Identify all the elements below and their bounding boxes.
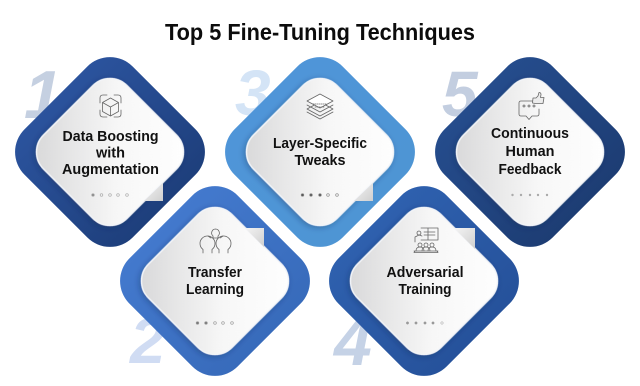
icon: cube in frame: [100, 95, 121, 117]
label 2: [186, 265, 244, 298]
label 1: [62, 129, 159, 178]
corner fold 2: [245, 228, 264, 247]
number 4: 4: [332, 304, 372, 380]
corner fold 1: [144, 183, 163, 201]
corner fold 3: [354, 183, 373, 201]
inner diamond 3: [237, 69, 403, 235]
number 2: 2: [129, 305, 166, 377]
progress dots 3: [301, 194, 338, 196]
label 5: Feedback: [498, 162, 562, 178]
inner diamond 2: [132, 198, 298, 364]
panel: step 4 adversarial training: [316, 173, 532, 386]
progress dots 2: [196, 322, 233, 324]
label 1: Augmentation: [62, 162, 159, 178]
label 4: [386, 265, 464, 298]
label 4: Adversarial: [386, 265, 464, 281]
label 3: [273, 136, 367, 169]
inner diamond 1: [27, 69, 193, 235]
label 3: Tweaks: [294, 153, 346, 169]
progress dots 1: [92, 194, 128, 196]
panel: step 1 data boosting: [2, 44, 218, 260]
label 2: Learning: [186, 282, 244, 298]
panel: step 3 layer-specific: [212, 44, 428, 260]
label 5: Continuous: [491, 126, 569, 142]
title: Top 5 Fine-Tuning Techniques: [165, 19, 475, 45]
panel: step 2 transfer learning: [107, 173, 323, 386]
progress dots 4: [406, 322, 443, 324]
label 2: Transfer: [188, 265, 242, 281]
outer diamond 2: [107, 173, 323, 386]
label 4: Training: [398, 282, 452, 298]
number 3: 3: [235, 57, 271, 129]
icon: presenter and audience: [414, 228, 438, 252]
progress dots 5: [511, 194, 548, 196]
label 1: with: [95, 146, 125, 162]
label 5: Human: [506, 144, 554, 160]
outer diamond 3: [212, 44, 428, 260]
icon: layers: [307, 94, 333, 119]
label 1: Data Boosting: [62, 129, 158, 145]
outer diamond 5: [422, 44, 638, 260]
icon: heads with lightbulb: [200, 229, 231, 253]
inner diamond 5: [447, 69, 613, 235]
inner diamond 4: [341, 198, 507, 364]
number 5: 5: [442, 58, 479, 130]
label 5: [491, 126, 569, 178]
panel: step 5 continuous feedback: [422, 44, 638, 260]
number 1: 1: [24, 57, 62, 133]
outer diamond 4: [316, 173, 532, 386]
icon: chat with thumbs up: [519, 92, 544, 120]
corner fold 4: [454, 228, 475, 249]
label 3: Layer-Specific: [273, 136, 367, 152]
outer diamond 1: [2, 44, 218, 260]
